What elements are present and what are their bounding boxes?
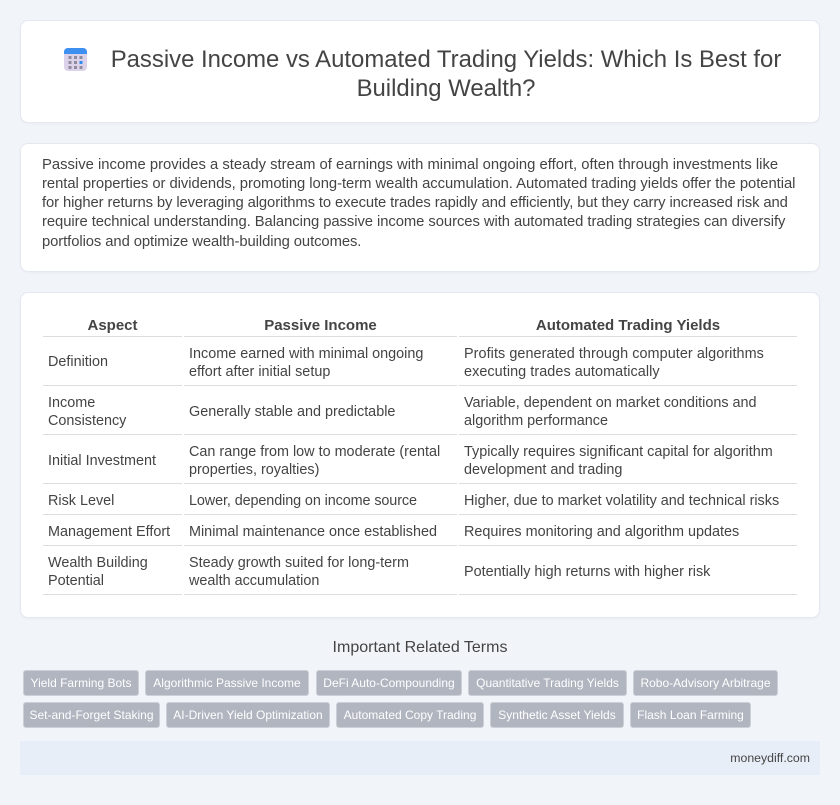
panel: comparison table xyxy=(20,292,820,618)
row: wealth building potential: Potentially high returns with higher risk xyxy=(464,564,710,580)
row: definition: Profits generated through computer algorithms xyxy=(464,346,764,362)
row: definition: executing trades automatically xyxy=(464,364,660,380)
row: definition: Definition xyxy=(48,354,108,370)
tags: related terms: AI-Driven Yield Optimization xyxy=(173,708,323,722)
tags: related terms: Robo-Advisory Arbitrage xyxy=(640,676,771,690)
row: initial investment: properties, royalties) xyxy=(189,462,319,478)
row: income consistency: Variable, dependent on market conditions and xyxy=(464,395,757,411)
row: initial investment: Can range from low to moderate (rental xyxy=(189,444,440,460)
table header: Passive Income xyxy=(264,317,377,334)
heading: related terms: Important Related Terms xyxy=(333,639,507,656)
tags: related terms: Yield Farming Bots xyxy=(31,676,131,690)
footer source: moneydiff.com xyxy=(730,751,810,765)
row: wealth building potential: Potential xyxy=(48,573,104,589)
panel: introduction: require technical understanding. Balancing passive income sources with automated trading strategies can diversify xyxy=(42,214,785,230)
panel: introduction: rental properties or dividends, promoting long-term wealth accumulation. Automated trading yields offer the potential xyxy=(42,176,795,192)
row: wealth building potential xyxy=(48,555,710,589)
title: Passive Income vs Automated Trading Yields: Which Is Best for xyxy=(111,46,781,73)
row: management effort: Requires monitoring and algorithm updates xyxy=(464,524,739,540)
row: risk level: Higher, due to market volatility and technical risks xyxy=(464,493,779,509)
panel: introduction xyxy=(20,143,820,272)
tags: related terms: DeFi Auto-Compounding xyxy=(323,676,455,690)
panel: introduction: Passive income provides a steady stream of earnings with minimal ongoing effort, often through investments like xyxy=(42,157,778,173)
tags: related terms: Set-and-Forget Staking xyxy=(29,708,154,722)
row: definition xyxy=(48,346,764,380)
row: risk level: Lower, depending on income source xyxy=(189,493,417,509)
row: wealth building potential: Wealth Building xyxy=(48,555,148,571)
row: wealth building potential: Steady growth suited for long-term xyxy=(189,555,409,571)
panel: introduction: portfolios and optimize wealth-building outcomes. xyxy=(42,234,361,250)
tags: related terms xyxy=(23,670,778,728)
title: Building Wealth? xyxy=(357,75,535,102)
row: income consistency: Income xyxy=(48,395,95,411)
row: initial investment xyxy=(48,444,773,478)
table header xyxy=(87,317,720,334)
row: wealth building potential: wealth accumulation xyxy=(189,573,319,589)
tags: related terms: Automated Copy Trading xyxy=(344,708,476,722)
header card xyxy=(20,20,820,123)
row: management effort: Minimal maintenance once established xyxy=(189,524,437,540)
row: initial investment: Initial Investment xyxy=(48,453,156,469)
row: definition: effort after initial setup xyxy=(189,364,330,380)
tags: related terms: Quantitative Trading Yields xyxy=(476,676,619,690)
tags: related terms: Flash Loan Farming xyxy=(637,708,744,722)
row: initial investment: development and trading xyxy=(464,462,622,478)
row: management effort xyxy=(48,524,739,540)
row: income consistency: Consistency xyxy=(48,413,126,429)
row: risk level: Risk Level xyxy=(48,493,114,509)
panel: introduction: for higher returns by leveraging algorithms to execute trades rapidly and efficiently, but they carry increased risk and xyxy=(42,195,788,211)
table header: Automated Trading Yields xyxy=(536,317,720,334)
row: initial investment: Typically requires significant capital for algorithm xyxy=(464,444,773,460)
footer bar xyxy=(20,741,820,775)
row: income consistency: algorithm performance xyxy=(464,413,608,429)
row: income consistency: Generally stable and predictable xyxy=(189,404,395,420)
icon: calendar xyxy=(64,48,87,71)
row: income consistency xyxy=(48,395,757,429)
tags: related terms: Algorithmic Passive Income xyxy=(153,676,301,690)
table header: Aspect xyxy=(87,317,138,334)
tags: related terms: Synthetic Asset Yields xyxy=(498,708,616,722)
row: definition: Income earned with minimal ongoing xyxy=(189,346,423,362)
row: risk level xyxy=(48,493,779,509)
row: management effort: Management Effort xyxy=(48,524,170,540)
title xyxy=(111,46,781,102)
